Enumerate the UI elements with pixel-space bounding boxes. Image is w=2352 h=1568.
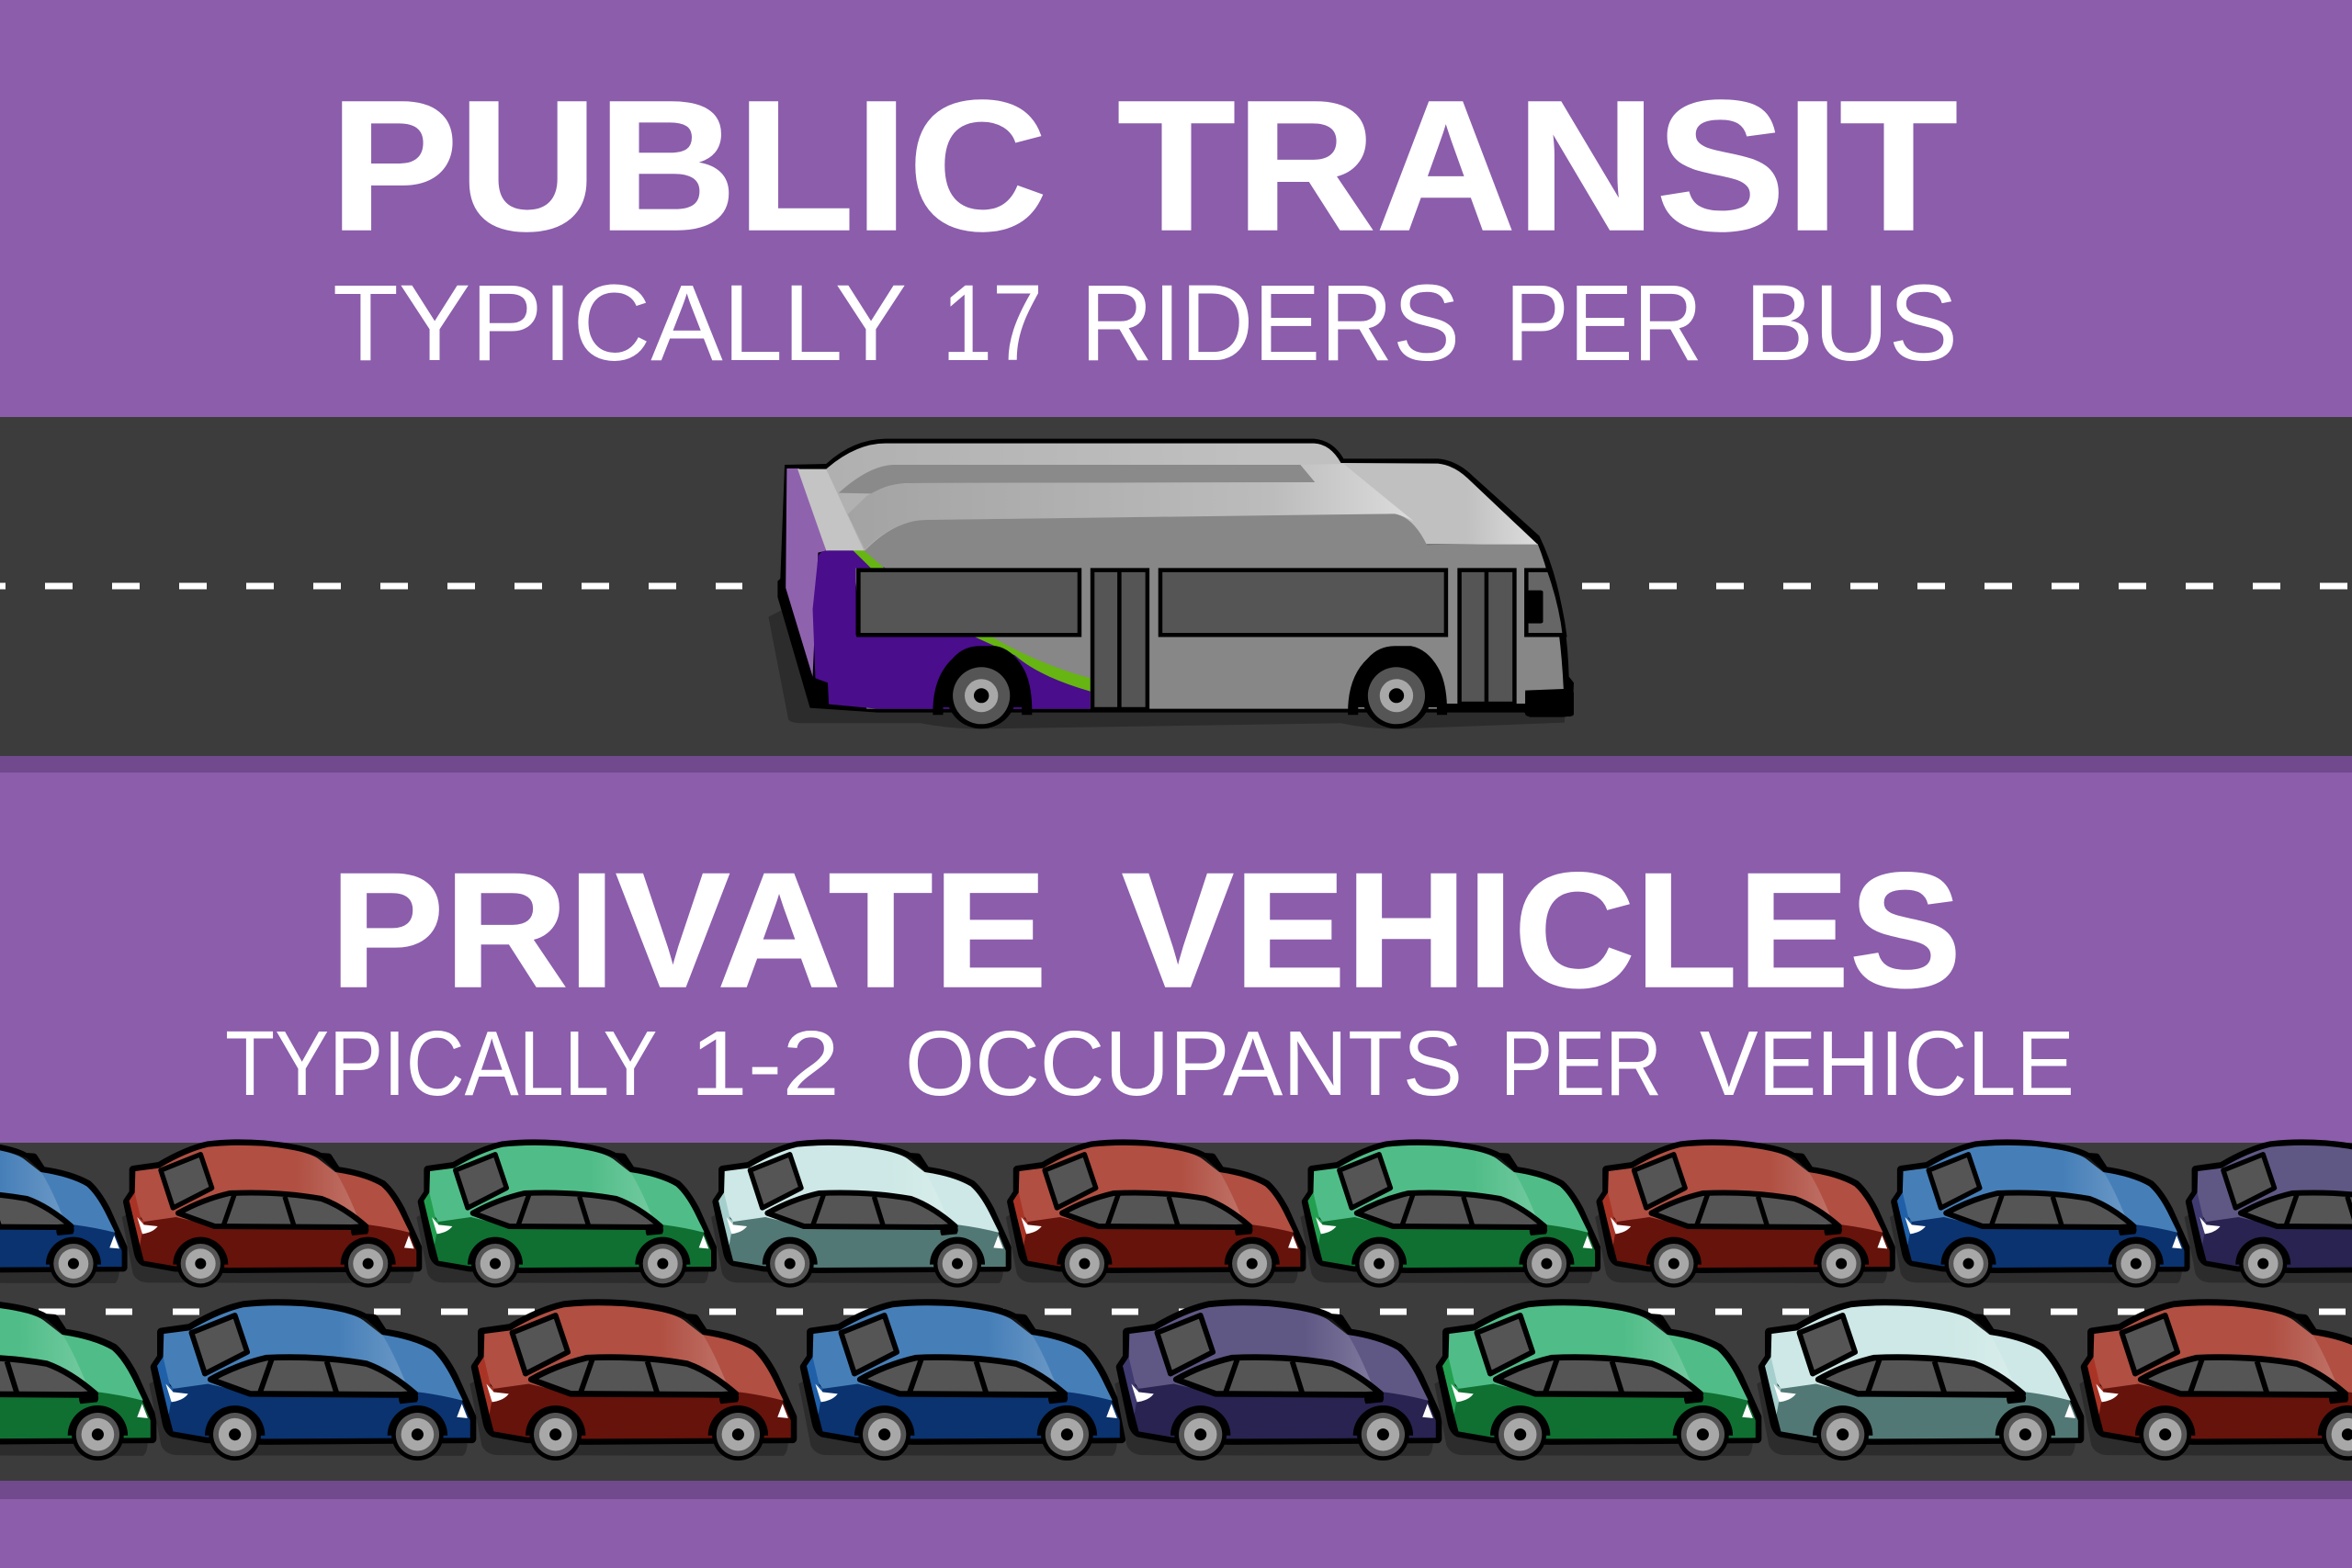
subheading: riders per bus: BUS — [1745, 263, 1958, 384]
heading: private vehicles: VEHICLES — [1122, 839, 1962, 1021]
subheading: occupants per vehicle: TYPICALLY — [225, 1012, 656, 1115]
car: blue — [798, 1303, 1122, 1461]
subheading: occupants per vehicle: 1-2 — [690, 1012, 840, 1115]
subheading: riders per bus: TYPICALLY — [333, 263, 905, 384]
car: green — [1434, 1303, 1758, 1461]
heading: public transit: TRANSIT — [1117, 62, 1958, 269]
car: red — [1006, 1144, 1302, 1288]
car: purple — [1114, 1303, 1438, 1461]
road surface — [0, 1143, 2352, 1481]
car: purple — [2185, 1144, 2352, 1288]
car: green — [1300, 1144, 1597, 1288]
subheading: occupants per vehicle: PER — [1500, 1012, 1662, 1115]
road surface — [0, 417, 2352, 756]
car: blue — [0, 1144, 123, 1288]
car: blue — [1890, 1144, 2186, 1288]
heading: private vehicles: PRIVATE — [330, 839, 1047, 1021]
panel: private vehicles header — [225, 839, 2075, 1115]
panel: public transit header — [330, 62, 1958, 384]
car: green — [0, 1303, 153, 1461]
top row of cars — [0, 1144, 2352, 1288]
car: pale teal — [711, 1144, 1007, 1288]
car: blue — [149, 1303, 472, 1461]
road edge shadow — [0, 756, 2352, 773]
subheading: riders per bus: PER — [1505, 263, 1702, 384]
panel: bus road — [0, 417, 2352, 773]
lane dashes — [0, 1308, 2352, 1315]
car: pale teal — [1757, 1303, 2080, 1461]
subheading: riders per bus: RIDERS — [1080, 263, 1460, 384]
car: red — [469, 1303, 793, 1461]
car: red — [122, 1144, 418, 1288]
car: red — [1595, 1144, 1891, 1288]
heading: public transit: PUBLIC — [330, 62, 1047, 269]
subheading: occupants per vehicle: OCCUPANTS — [905, 1012, 1463, 1115]
road edge shadow — [0, 1481, 2352, 1499]
icon: bus — [768, 439, 1574, 729]
bottom row of cars — [0, 1303, 2352, 1461]
car: red — [2079, 1303, 2352, 1461]
car: green — [416, 1144, 713, 1288]
subheading: riders per bus: 17 — [942, 263, 1043, 384]
subheading: occupants per vehicle: VEHICLE — [1700, 1012, 2075, 1115]
lane dashes — [0, 582, 2352, 590]
panel: cars road — [0, 1143, 2352, 1499]
